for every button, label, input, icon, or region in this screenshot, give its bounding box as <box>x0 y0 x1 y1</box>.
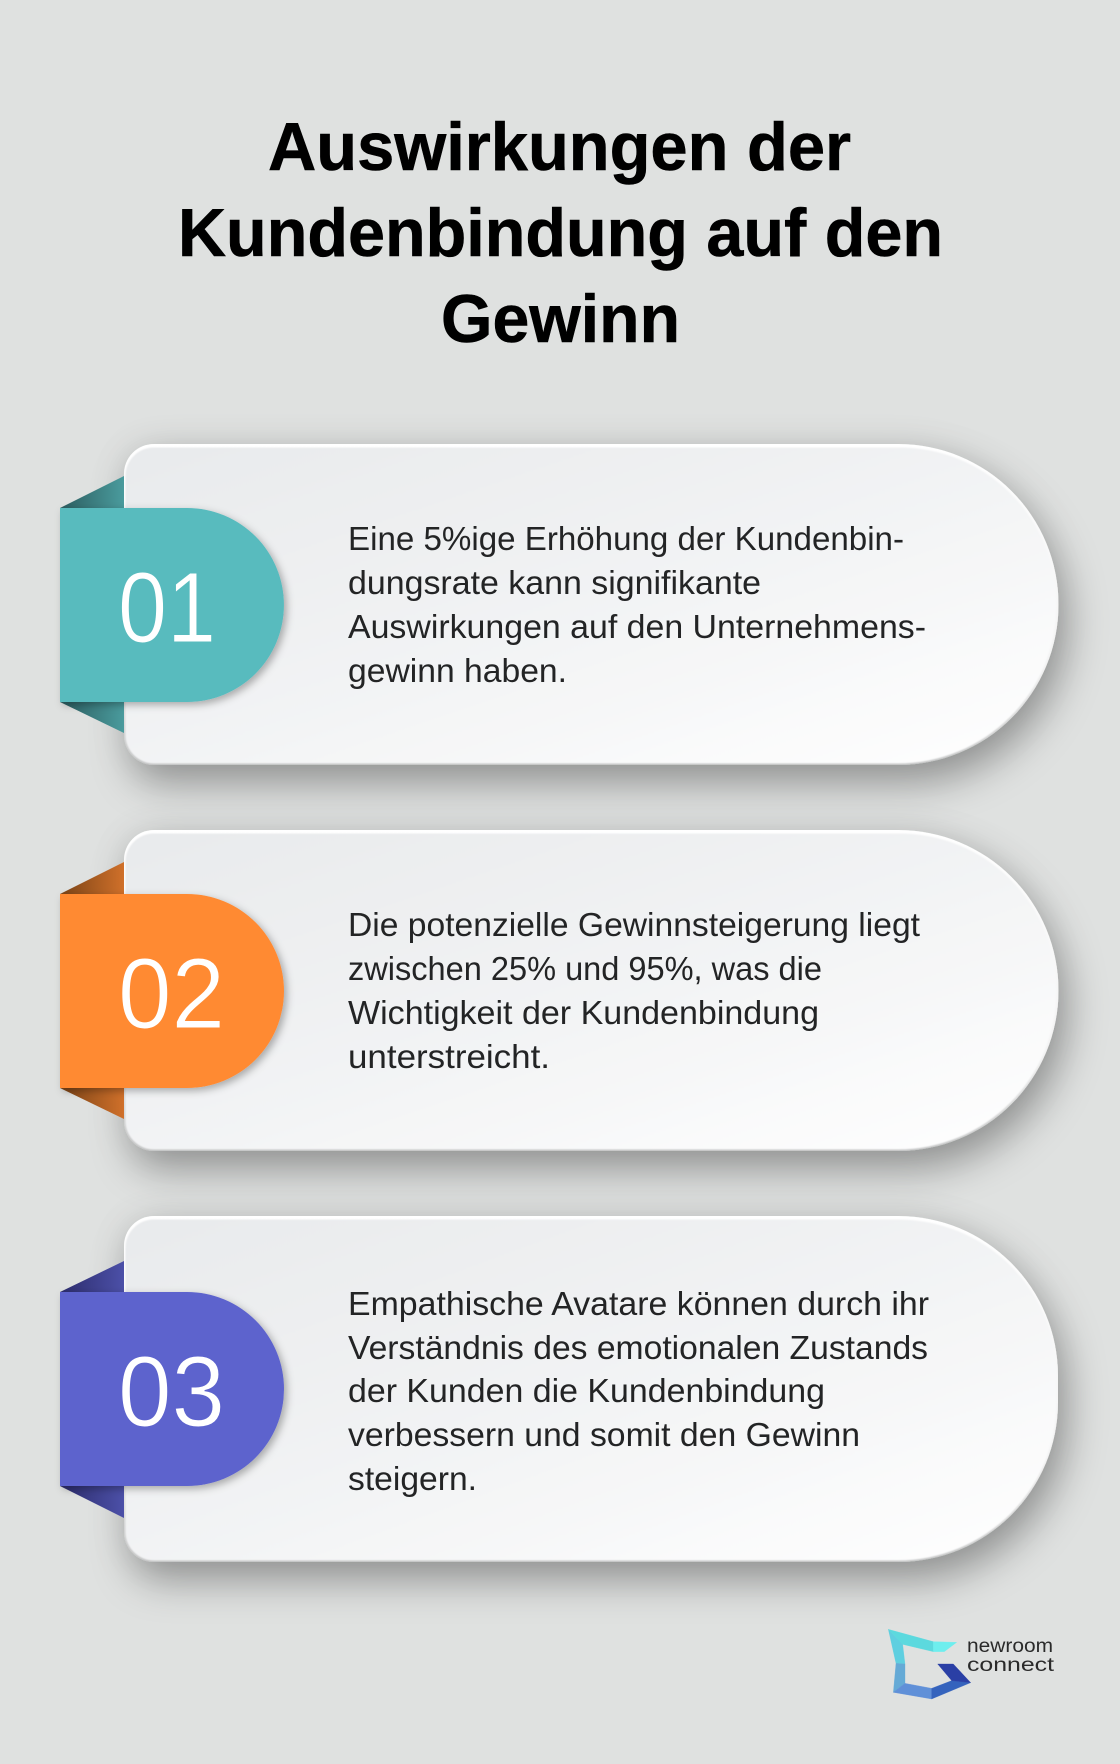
number 02: 02 <box>118 938 225 1050</box>
text 02: unterstreicht. <box>348 1038 550 1075</box>
text 02 <box>348 906 920 1075</box>
text 02: Wichtigkeit der Kundenbindung <box>348 994 819 1031</box>
logo: newroom connect <box>888 1629 1055 1699</box>
number 03: 03 <box>118 1336 225 1448</box>
title: Kundenbindung auf den <box>178 195 943 271</box>
text 03: Verständnis des emotionalen Zustands <box>348 1329 928 1366</box>
number 01: 01 <box>118 552 216 664</box>
title: Gewinn <box>441 281 680 357</box>
text 03 <box>348 1285 929 1497</box>
ribbon fold bottom 01 <box>60 702 124 733</box>
ribbon fold top 02 <box>60 862 124 894</box>
title: Auswirkungen der <box>268 109 851 185</box>
icon: logo mark <box>888 1629 971 1699</box>
text 01 <box>348 520 926 689</box>
card 03 <box>124 1216 1058 1562</box>
wordmark: newroom <box>967 1636 1053 1657</box>
number badge 03 <box>60 1292 284 1486</box>
panel: step 03 <box>60 1216 1058 1562</box>
ribbon fold top 01 <box>60 476 124 508</box>
text 01: dungsrate kann signifikante <box>348 564 761 601</box>
panel: step 02 <box>60 830 1058 1151</box>
text 01: gewinn haben. <box>348 652 567 689</box>
panel: step 01 <box>60 444 1058 765</box>
title <box>178 109 943 357</box>
ribbon fold bottom 02 <box>60 1088 124 1119</box>
text 03: verbessern und somit den Gewinn <box>348 1416 860 1453</box>
card 02 <box>124 830 1058 1151</box>
card 01 <box>124 444 1058 765</box>
text 01: Eine 5%ige Erhöhung der Kundenbin- <box>348 520 904 557</box>
text 03: Empathische Avatare können durch ihr <box>348 1285 929 1322</box>
wordmark <box>967 1636 1055 1676</box>
text 03: der Kunden die Kundenbindung <box>348 1372 825 1409</box>
ribbon fold bottom 03 <box>60 1486 124 1518</box>
text 01: Auswirkungen auf den Unternehmens- <box>348 608 926 645</box>
number badge 02 <box>60 894 284 1088</box>
ribbon fold top 03 <box>60 1261 124 1292</box>
wordmark: connect <box>967 1655 1055 1676</box>
text 03: steigern. <box>348 1460 477 1497</box>
text 02: Die potenzielle Gewinnsteigerung liegt <box>348 906 920 943</box>
number badge 01 <box>60 508 284 702</box>
text 02: zwischen 25% und 95%, was die <box>348 950 822 987</box>
